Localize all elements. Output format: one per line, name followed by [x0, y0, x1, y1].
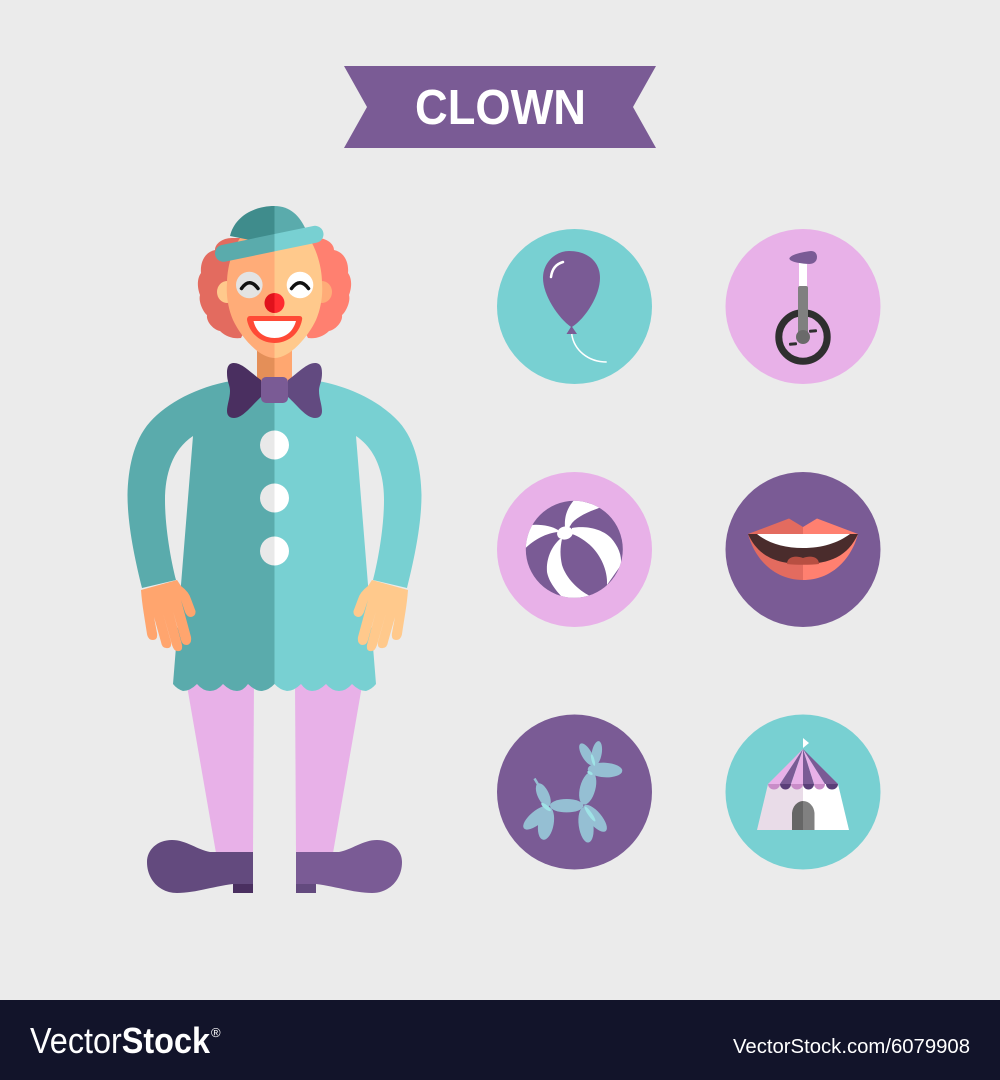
registered mark: ® — [211, 1025, 221, 1040]
coat left half — [128, 378, 274, 691]
icon: beach ball — [497, 472, 652, 627]
coat right half — [274, 378, 422, 691]
legs — [186, 680, 363, 853]
footer bar — [0, 1000, 1000, 1080]
neck — [257, 345, 292, 385]
left hand — [141, 580, 196, 651]
icon: circus tent — [726, 714, 880, 870]
hat — [224, 206, 315, 253]
eyes — [236, 272, 313, 298]
footer logo: VectorStock — [30, 1020, 211, 1061]
ears — [217, 281, 332, 303]
icon: smiling mouth — [726, 472, 880, 627]
right shoe — [296, 840, 402, 893]
right hand — [353, 580, 408, 651]
icon: balloon dog — [497, 714, 652, 870]
hair left — [198, 238, 260, 338]
icon: balloon — [497, 229, 652, 384]
footer image id: VectorStock.com/6079908 — [733, 1036, 970, 1058]
bow tie — [227, 363, 322, 418]
smile — [247, 316, 302, 343]
clown character — [128, 206, 422, 893]
title banner — [344, 66, 656, 148]
hair right — [289, 238, 351, 338]
title banner: CLOWN — [415, 81, 586, 135]
face — [227, 225, 322, 358]
icon: unicycle — [726, 229, 880, 384]
coat buttons — [260, 430, 289, 566]
nose — [264, 293, 284, 313]
left shoe — [147, 840, 253, 893]
